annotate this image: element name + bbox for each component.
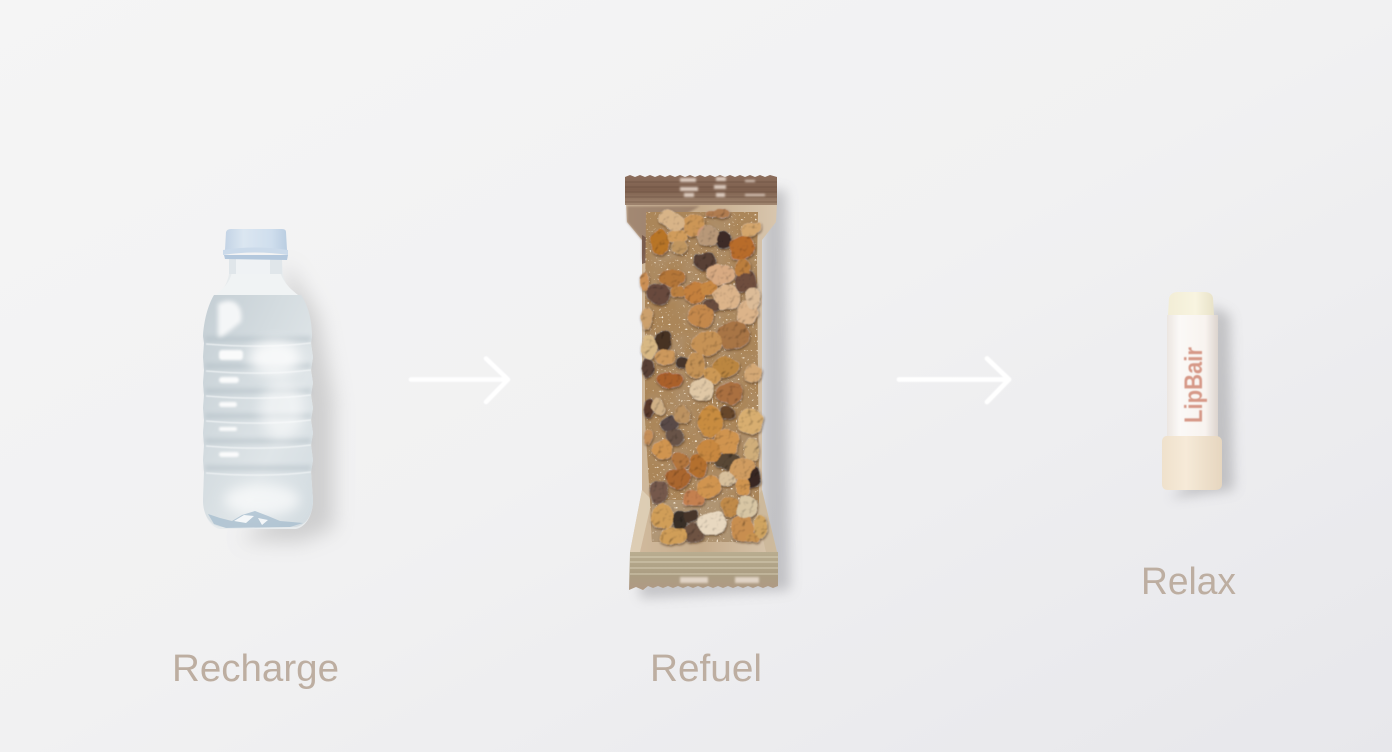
wrapper	[626, 204, 777, 552]
nuts and raisins	[641, 208, 765, 544]
rib highlights	[206, 343, 311, 475]
balm shadow	[1170, 305, 1234, 498]
bottle shadow	[240, 262, 334, 542]
balm label: LipBair	[1180, 347, 1208, 423]
arrow 1	[411, 358, 508, 402]
bottle neck	[229, 258, 282, 274]
label: Relax: Relax	[1141, 561, 1236, 603]
bar shadow	[640, 190, 790, 598]
top seal	[625, 175, 777, 205]
filling base	[645, 212, 759, 542]
bottom seal	[629, 552, 778, 590]
icon: lip balm	[1162, 292, 1234, 498]
label: Refuel: Refuel	[650, 648, 762, 690]
bottle body	[203, 260, 313, 529]
arrow 2	[899, 358, 1009, 402]
balm cap	[1162, 436, 1222, 490]
balm tube	[1167, 315, 1218, 437]
bottle cap	[225, 229, 287, 250]
icon: water bottle	[203, 229, 334, 542]
shoulder highlight	[216, 272, 298, 295]
rib shading	[205, 336, 311, 471]
label: Recharge: Recharge	[172, 648, 339, 690]
water	[203, 295, 313, 527]
balm stick	[1168, 292, 1214, 315]
wrapper corner tones	[627, 206, 700, 262]
icon: snack bar	[625, 175, 790, 598]
glints	[218, 301, 304, 516]
bottle base	[208, 511, 303, 528]
